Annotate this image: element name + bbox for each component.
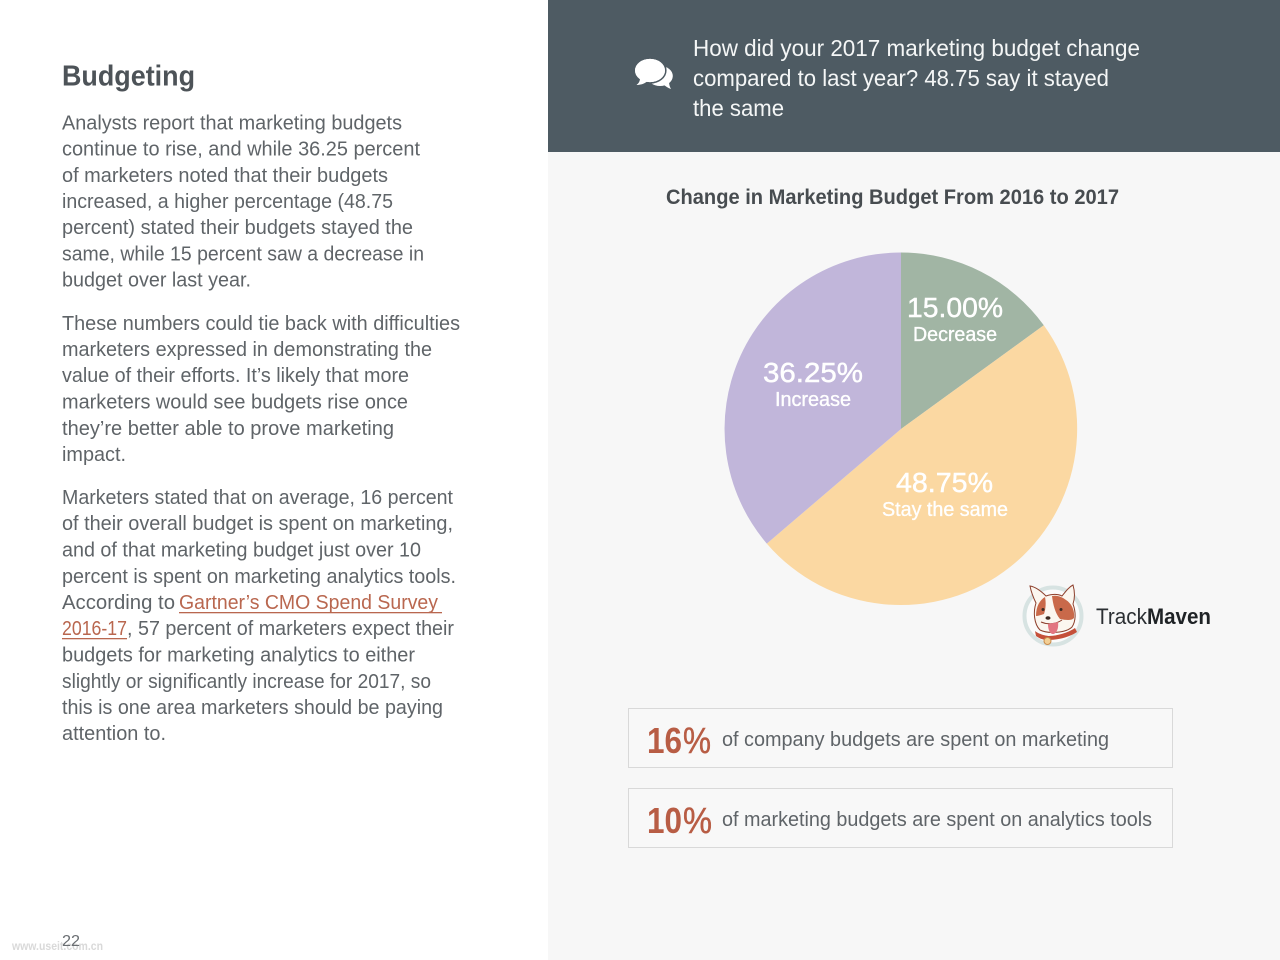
- wordmark: Maven: [1147, 604, 1211, 629]
- wordmark: Track: [1096, 604, 1148, 629]
- text block: paragraph 3: and of that marketing budget just over 10: [62, 540, 421, 562]
- stat card: 16%: of company budgets are spent on marketing: [722, 729, 1109, 751]
- icon: corgi mascot: [1024, 585, 1082, 644]
- text block: paragraph 3: Gartner’s CMO Spend Survey: [179, 592, 438, 614]
- label: 15.00% decrease: Decrease: [913, 324, 997, 346]
- label: 48.75% stay the same: Stay the same: [882, 499, 1008, 521]
- stat card: 10%: 10: [647, 800, 682, 841]
- text block: paragraph 1: budget over last year.: [62, 270, 251, 292]
- text block: paragraph 3: percent is spent on marketing analytics tools.: [62, 566, 456, 588]
- text block: paragraph 3: attention to.: [62, 723, 166, 745]
- text block: paragraph 2: marketers would see budgets rise once: [62, 392, 408, 414]
- text block: paragraph 1: percent) stated their budgets stayed the: [62, 217, 413, 239]
- heading: Budgeting: Budgeting: [62, 60, 195, 92]
- slice: increase 36.25%: [725, 252, 901, 544]
- text block: paragraph 3: 2016-17: [62, 618, 127, 640]
- stat card: 10%: [628, 788, 1172, 848]
- text: callout question: How did your 2017 marketing budget change: [693, 35, 1140, 61]
- chart title: Change in Marketing Budget From 2016 to 2017: [666, 186, 1119, 209]
- text block: paragraph 1: increased, a higher percentage (48.75: [62, 191, 393, 213]
- text block: paragraph 3: budgets for marketing analytics to either: [62, 644, 415, 666]
- text block: paragraph 3: According to: [62, 592, 175, 614]
- text block: paragraph 2: value of their efforts. It’s likely that more: [62, 365, 409, 387]
- text block: paragraph 3: , 57 percent of marketers expect their: [127, 618, 454, 640]
- stat card: 10%: of marketing budgets are spent on analytics tools: [722, 809, 1152, 831]
- slice: stay the same 48.75%: [767, 325, 1077, 605]
- text: callout question: [693, 35, 1140, 121]
- text block: paragraph 1: same, while 15 percent saw a decrease in: [62, 244, 424, 266]
- text block: paragraph 2: marketers expressed in demonstrating the: [62, 339, 432, 361]
- text block: paragraph 2: These numbers could tie back with difficulties: [62, 313, 460, 335]
- text block: paragraph 3: [62, 487, 456, 745]
- logo: TrackMaven: [1024, 585, 1211, 644]
- icon: chat bubbles: [634, 58, 673, 89]
- text block: paragraph 3: of their overall budget is spent on marketing,: [62, 513, 453, 535]
- watermark: www.useit.com.cn: [11, 941, 103, 953]
- text block: paragraph 3: this is one area marketers should be paying: [62, 697, 443, 719]
- stat card: 16%: %: [683, 720, 711, 761]
- text block: paragraph 3: slightly or significantly increase for 2017, so: [62, 671, 431, 693]
- text block: paragraph 2: impact.: [62, 444, 126, 466]
- slice: decrease 15%: [901, 252, 1044, 429]
- label: 36.25% increase: 36.25%: [763, 357, 863, 388]
- text: callout question: the same: [693, 95, 784, 121]
- label: 15.00% decrease: 15.00%: [907, 292, 1003, 323]
- text block: paragraph 3: Marketers stated that on average, 16 percent: [62, 487, 453, 509]
- text: callout question: compared to last year? 48.75 say it stayed: [693, 65, 1109, 91]
- text block: paragraph 1: Analysts report that marketing budgets: [62, 112, 402, 134]
- label: 15.00% decrease: [907, 292, 1003, 346]
- pie chart: change in marketing budget: [725, 252, 1077, 605]
- stat card: 16%: [628, 708, 1172, 768]
- label: 48.75% stay the same: [882, 467, 1008, 521]
- label: 36.25% increase: [763, 357, 863, 411]
- text block: paragraph 2: they’re better able to prove marketing: [62, 418, 394, 440]
- panel: right page background: [548, 0, 1280, 960]
- stat card: 10%: %: [683, 800, 712, 841]
- wordmark: [1096, 604, 1211, 629]
- label: 48.75% stay the same: 48.75%: [896, 467, 993, 498]
- text block: paragraph 1: [62, 112, 424, 292]
- text block: paragraph 1: continue to rise, and while 36.25 percent: [62, 138, 420, 160]
- panel: survey callout banner: [548, 0, 1280, 152]
- panel: left page background: [0, 0, 548, 960]
- stat card: 16%: 16: [647, 720, 682, 761]
- page number: 22: [62, 933, 80, 950]
- text block: paragraph 1: of marketers noted that their budgets: [62, 165, 388, 187]
- label: 36.25% increase: Increase: [775, 389, 851, 411]
- text block: paragraph 2: [62, 313, 460, 466]
